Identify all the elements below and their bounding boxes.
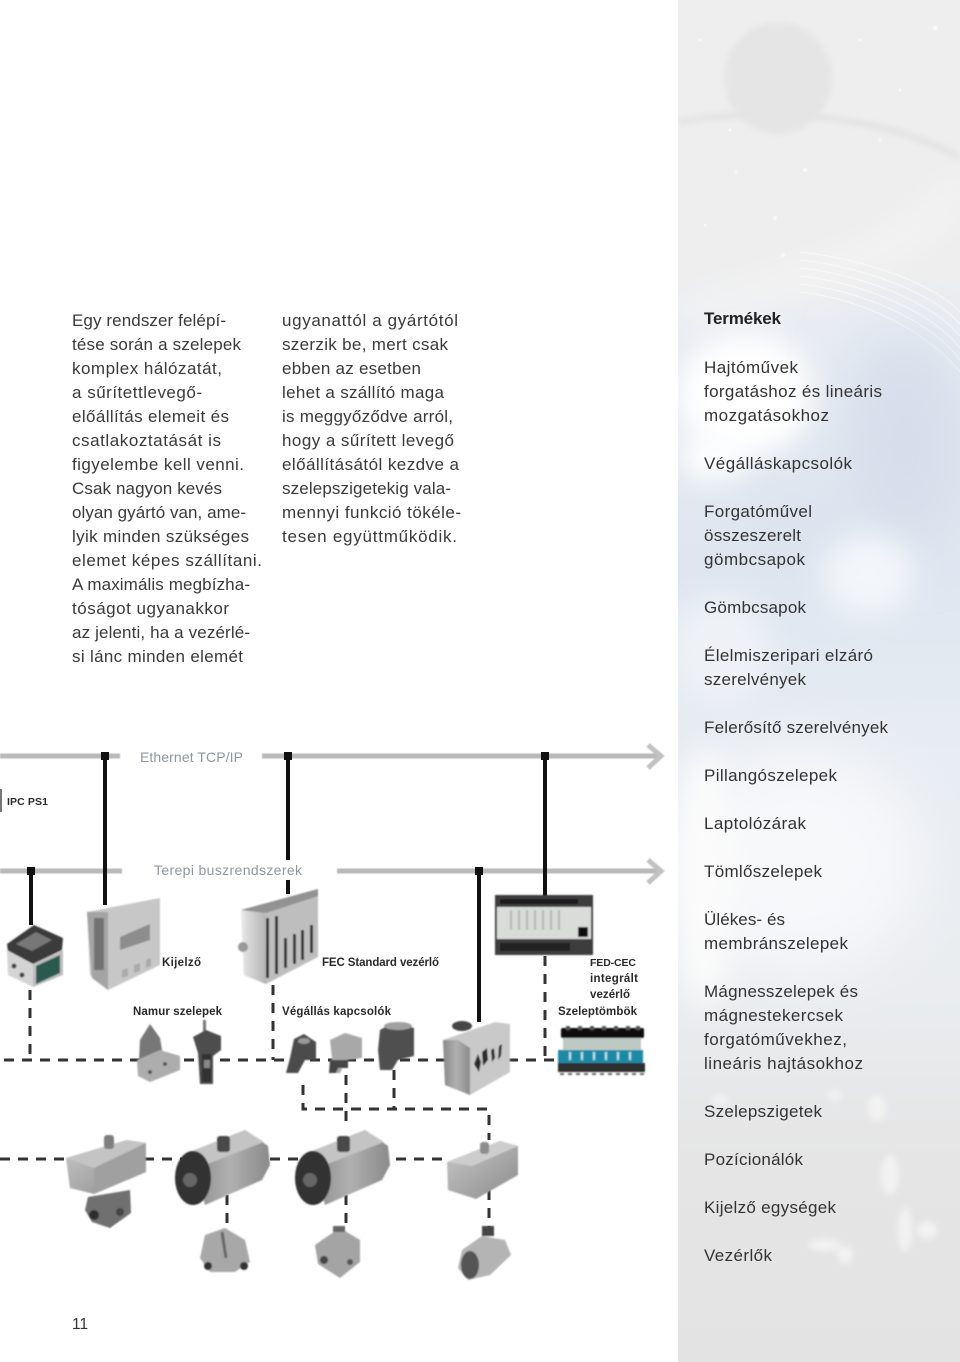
line: field bus with arrow — [0, 860, 661, 883]
label: FED-CEC integrált vezérlő: integrált — [590, 973, 638, 985]
text block: product list: Hajtóművek — [704, 358, 798, 377]
text block: left column: si lánc minden elemét — [72, 647, 243, 666]
connectors: black drops — [27, 752, 549, 1022]
text block: product list: gömbcsapok — [704, 550, 806, 569]
label: IPC PS1 — [0, 789, 48, 812]
label: Namur szelepek: Namur szelepek — [133, 1006, 223, 1018]
text block: middle column: ebben az esetben — [282, 359, 421, 378]
page number: 11 — [72, 1316, 88, 1333]
label: Terepi buszrendszerek: Terepi buszrendszerek — [154, 862, 303, 878]
icon: limit switches — [286, 1022, 414, 1073]
text block: product list: Pillangószelepek — [704, 766, 838, 785]
text block: middle column: is meggyőződve arról, — [282, 407, 453, 426]
text block: left column: Csak nagyon kevés — [72, 479, 222, 498]
text block: product list: forgatóművekhez, — [704, 1030, 847, 1049]
text block: middle column: ugyanattól a gyártótól — [282, 311, 458, 330]
text block: left column: lyik minden szükséges — [72, 527, 249, 546]
label: Végállás kapcsolók: Végállás kapcsolók — [282, 1006, 392, 1018]
text block: product list: Mágnesszelepek és — [704, 982, 858, 1001]
icon: square actuator with ball valve 4 — [447, 1141, 518, 1280]
text block: middle column: hogy a sűrített levegő — [282, 431, 454, 450]
text block: product list: Felerősítő szerelvények — [704, 718, 888, 737]
icon: valve manifold — [558, 1026, 645, 1074]
text block: product list: mozgatásokhoz — [704, 406, 829, 425]
text block: product list: membránszelepek — [704, 934, 848, 953]
text block: left column: előállítás elemeit és — [72, 407, 229, 426]
text block: left column: olyan gyártó van, ame- — [72, 503, 246, 522]
line: Ethernet bus with arrow — [0, 745, 661, 768]
label: FED-CEC integrált vezérlő: vezérlő — [590, 989, 630, 1001]
text block: middle column: szelepszigetekig vala- — [282, 479, 451, 498]
icon: FED-CEC controller — [495, 895, 593, 955]
text block: middle column: lehet a szállító maga — [282, 383, 445, 402]
text block: left column: A maximális megbízha- — [72, 575, 250, 594]
text block: product list: Gömbcsapok — [704, 598, 806, 617]
text block: left column: Egy rendszer felépí- — [72, 311, 226, 330]
label: Szeleptömbök: Szeleptömbök — [558, 1006, 638, 1018]
text block: middle column: mennyi funkció tökéle- — [282, 503, 461, 522]
text block: product list: Laptolózárak — [704, 814, 806, 833]
text block: middle column — [282, 311, 461, 546]
label: FED-CEC integrált vezérlő — [590, 957, 638, 1001]
icon: valve terminal box — [443, 1021, 510, 1095]
text block: left column: tóságot ugyanakkor — [72, 599, 229, 618]
text block: left column: elemet képes szállítani. — [72, 551, 262, 570]
text block: middle column: előállításától kezdve a — [282, 455, 460, 474]
icon: FEC Standard controller — [238, 889, 318, 984]
text block: product list: lineáris hajtásokhoz — [704, 1054, 863, 1073]
text block: product list: Vezérlők — [704, 1246, 772, 1265]
label: FEC Standard vezérlő: FEC Standard vezérlő — [322, 957, 439, 969]
connectors: dashed device lines — [0, 956, 556, 1230]
text block: product list: összeszerelt — [704, 526, 801, 545]
text block: product list: Végálláskapcsolók — [704, 454, 852, 473]
icon: compact controller module — [7, 925, 63, 987]
text block: middle column: tesen együttműködik. — [282, 527, 457, 546]
text block: product list — [704, 358, 888, 1265]
text block: left column: komplex hálózatát, — [72, 359, 222, 378]
text block: product list: forgatáshoz és lineáris — [704, 382, 882, 401]
panel: product list background — [670, 0, 960, 1362]
text block: left column: csatlakoztatását is — [72, 431, 221, 450]
text block: left column: tése során a szelepek — [72, 335, 242, 354]
text block: product list: Tömlőszelepek — [704, 862, 822, 881]
heading: Termékek: Termékek — [704, 309, 782, 328]
text block: product list: Kijelző egységek — [704, 1198, 836, 1217]
icon: Namur valves — [137, 1020, 221, 1084]
text block: left column: figyelembe kell venni. — [72, 455, 244, 474]
text block: product list: Forgatóművel — [704, 502, 812, 521]
text block: product list: Szelepszigetek — [704, 1102, 822, 1121]
text block: left column: a sűrítettlevegő- — [72, 383, 202, 402]
text block: left column — [72, 311, 262, 666]
text block: product list: szerelvények — [704, 670, 806, 689]
label: Ethernet TCP/IP: Ethernet TCP/IP — [140, 749, 243, 765]
icon: square actuator with ball valve 1 — [66, 1135, 146, 1228]
text block: product list: mágnestekercsek — [704, 1006, 844, 1025]
text block: left column: az jelenti, ha a vezérlé- — [72, 623, 250, 642]
text block: product list: Élelmiszeripari elzáró — [704, 646, 873, 665]
icon: round actuator with ball valve 3 — [295, 1130, 390, 1278]
icon: round actuator with ball valve 2 — [175, 1130, 270, 1272]
label: IPC PS1: IPC PS1 — [7, 796, 48, 808]
label: FED-CEC integrált vezérlő: FED-CEC — [590, 957, 636, 969]
text block: product list: Pozícionálók — [704, 1150, 804, 1169]
icon: display unit — [87, 898, 160, 990]
label: Kijelző: Kijelző — [162, 957, 201, 969]
text block: product list: Ülékes- és — [704, 910, 785, 929]
text block: middle column: szerzik be, mert csak — [282, 335, 448, 354]
